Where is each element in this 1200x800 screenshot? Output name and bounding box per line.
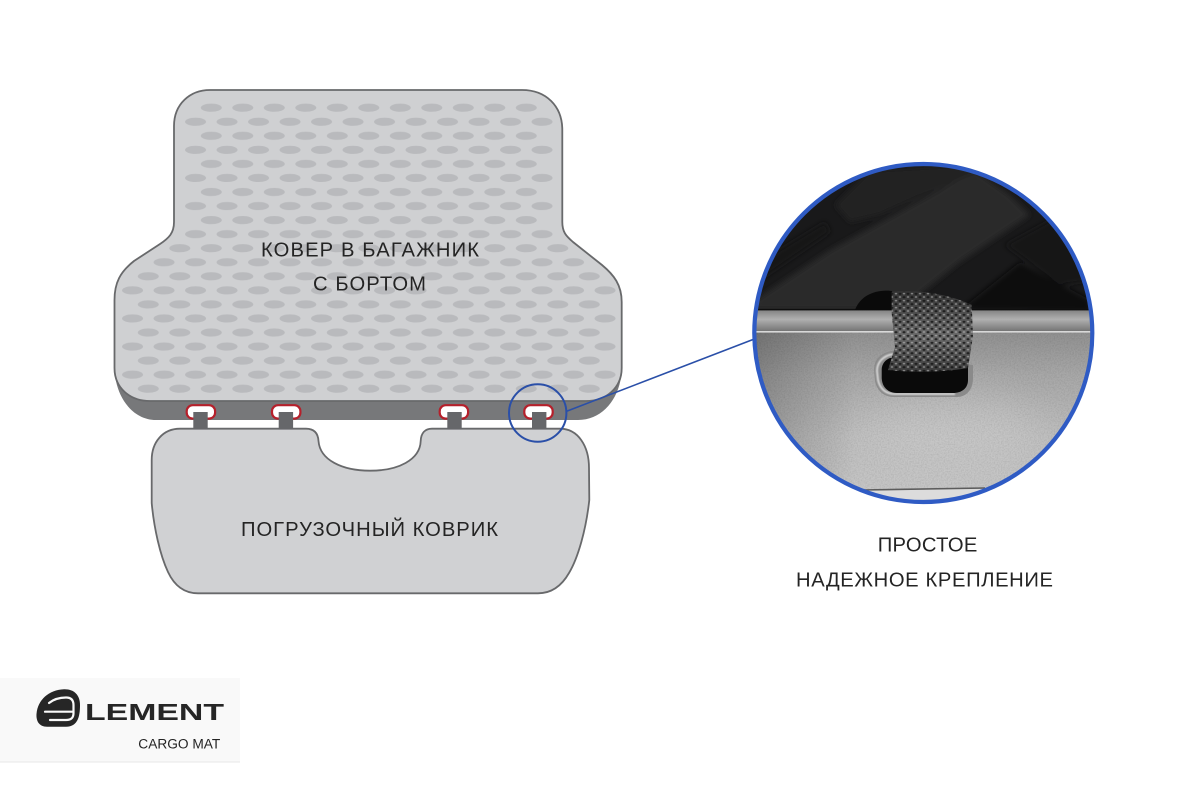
logo subtitle: CARGO MAT — [138, 737, 220, 752]
strap 3 — [447, 412, 462, 430]
plate bright patch — [896, 399, 1004, 436]
strap 2 — [279, 412, 293, 430]
liner top surface — [114, 90, 622, 401]
strap base — [888, 291, 973, 372]
detail caption — [796, 535, 1053, 592]
dark trunk background — [758, 166, 1088, 309]
trunk relief shapes — [755, 165, 1095, 312]
logo emblem — [36, 689, 80, 727]
plate grain — [757, 332, 1090, 489]
rail highlight — [750, 331, 1100, 333]
rail — [750, 310, 1100, 331]
metal plate — [756, 332, 1090, 489]
loading mat label: ПОГРУЗОЧНЫЙ КОВРИК — [241, 517, 498, 541]
slot shadow rim — [874, 351, 973, 397]
slot 1 — [187, 405, 215, 419]
rail shadow — [750, 309, 1100, 310]
detail caption: ПРОСТОЕ — [878, 535, 977, 557]
plate left shading — [756, 332, 834, 474]
slot 3 — [440, 405, 468, 419]
panel: loading mat — [152, 429, 589, 593]
logo background — [0, 678, 240, 762]
callout ring around strap — [509, 384, 566, 442]
photo ring — [754, 164, 1092, 502]
liner label: КОВЕР В БАГАЖНИК — [261, 240, 479, 262]
liner dot texture — [121, 103, 617, 394]
callout leader line — [566, 340, 753, 412]
strap 4 — [532, 412, 546, 430]
slots and straps connecting the mats — [187, 405, 553, 430]
strap weave — [888, 291, 973, 372]
liner side wall — [114, 368, 622, 420]
loading mat shape — [152, 429, 589, 593]
slot 4 — [524, 405, 553, 419]
panel: cargo liner with raised edge — [114, 90, 622, 420]
slot opening — [882, 358, 968, 393]
liner label: С БОРТОМ — [313, 274, 426, 296]
logo block — [0, 678, 240, 762]
detail caption: НАДЕЖНОЕ КРЕПЛЕНИЕ — [796, 570, 1053, 592]
strap 1 — [193, 412, 208, 430]
logo wordmark: LEMENT — [85, 699, 225, 725]
hole behind rail — [856, 290, 892, 309]
detail photo of attachment — [750, 160, 1100, 506]
plate bottom lip — [869, 489, 982, 500]
slot 2 — [272, 405, 300, 419]
liner label — [261, 240, 479, 296]
slot highlight rim — [877, 354, 955, 394]
